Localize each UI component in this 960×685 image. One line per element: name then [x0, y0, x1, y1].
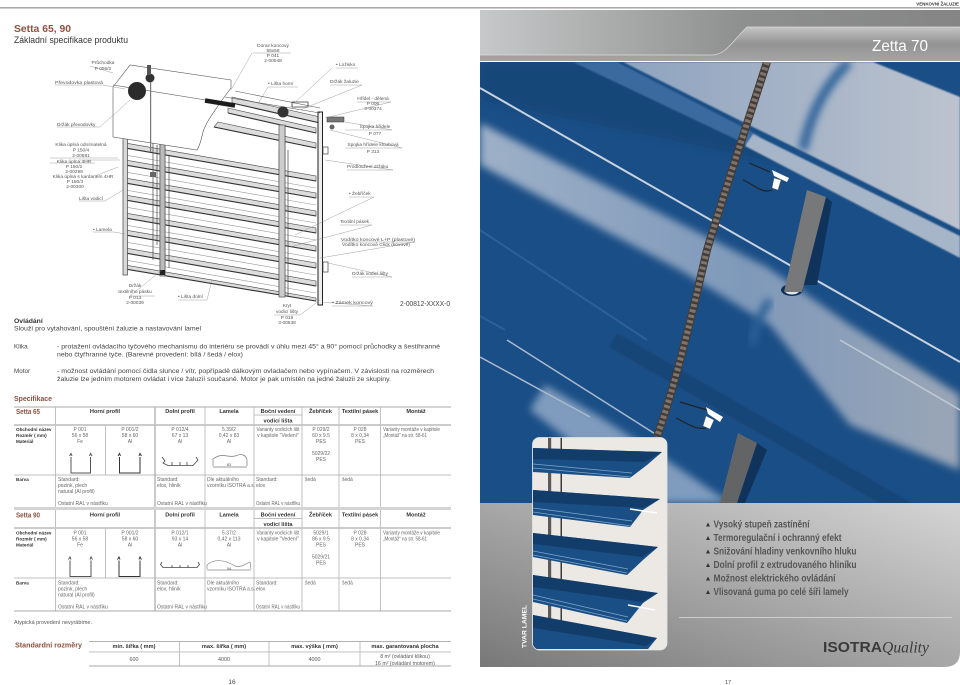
note: Atypická provedení nevyrábíme.	[14, 620, 92, 626]
strap shadow	[804, 197, 832, 285]
part labels: P 150/2	[66, 164, 83, 170]
spec table: Setta 90: Lamela	[219, 512, 240, 518]
part labels: 56x58	[266, 48, 280, 54]
spec table: Setta 90: Dle aktuálního	[207, 580, 239, 586]
lamellae	[125, 97, 320, 301]
spec table: Setta 65: Ostatní RAL v nástřiku	[157, 501, 207, 507]
spec table: Setta 90: Obchodní název	[16, 530, 52, 536]
part labels: P 313	[367, 149, 380, 155]
profile icon: lamella 5.39/2	[213, 455, 247, 467]
text block: Ovládání: Ovládání	[14, 318, 44, 325]
part labels: Držák žaluzie	[330, 79, 359, 85]
spec table: Setta 65: Dle aktuálního	[207, 477, 239, 483]
part labels: 2-00300	[66, 184, 84, 190]
part labels: Hřídel - dělená	[357, 96, 389, 102]
part labels: P 056/2	[95, 66, 112, 72]
part labels: 2-00039	[126, 300, 144, 306]
spec table: Setta 90: Barva	[16, 580, 29, 586]
spec table: Setta 90: 5029/21	[312, 554, 330, 560]
spec table: Setta 65: P 012/4	[171, 427, 189, 433]
profile icon: P 001	[68, 557, 92, 576]
spec table: Setta 90: Varianty vodicích lišt	[256, 530, 300, 536]
spec table: Setta 65: P 029/2	[312, 427, 330, 433]
drawing number: 2-00812-XXXX-0	[400, 301, 450, 308]
dimensions table: 4000	[218, 657, 230, 663]
spec table: Setta 65: Horní profil	[90, 409, 121, 415]
photo: blue lamellae close-up	[480, 62, 960, 540]
part labels: Klika úplná 4HR	[57, 159, 92, 165]
feature list: Možnost elektrického ovládání	[714, 574, 836, 584]
spec table: Setta 90: Fe	[77, 542, 83, 548]
part labels: 2-00048	[264, 58, 282, 64]
inset photo: lamella shape	[532, 437, 667, 650]
part labels: • Lišta dolní	[178, 294, 204, 300]
feature list: Snižování hladiny venkovního hluku	[714, 546, 856, 558]
right page header band	[480, 10, 960, 61]
feature list: Termoregulační i ochranný efekt	[714, 533, 842, 544]
spec table: Setta 90: Al	[128, 542, 132, 548]
spec table: Setta 90: šedá	[305, 580, 316, 586]
spec table: Setta 65: Al	[227, 439, 231, 445]
spec table: Setta 90	[14, 510, 451, 612]
spec table: Setta 65: Varianty vodicích lišt	[256, 427, 300, 433]
spec table: Setta 90: P 001	[74, 530, 87, 536]
feature list	[706, 520, 856, 598]
spec table: Setta 90: Standard:	[157, 580, 179, 586]
spec table: Setta 90: Žebříček	[309, 510, 333, 518]
upper light band	[623, 62, 960, 230]
spec table: Setta 65: Fe	[77, 439, 83, 445]
logo: Isotra Quality: ISOTRA	[823, 640, 883, 656]
spec table: Setta 65: Žebříček	[309, 407, 333, 415]
vertical label: Tvar lamel: TVAR LAMEL	[522, 605, 528, 648]
divider	[679, 616, 952, 619]
part labels: • Zámek koncový	[332, 300, 374, 306]
part labels: • Lišta horní	[268, 81, 294, 87]
spec table: Setta 90: Al	[178, 542, 182, 548]
spec table: Setta 65: šedá	[305, 477, 316, 483]
spec table: Setta 65: PES	[316, 439, 327, 445]
profile icon: P 012/1	[160, 562, 200, 568]
spec table: Setta 90: Montáž	[406, 512, 426, 518]
part labels: P 013	[129, 295, 142, 301]
spec table: Setta 65: Boční vedení	[261, 409, 296, 415]
part labels: Textilní pásek	[340, 219, 370, 225]
spec table: Setta 90: PES	[316, 542, 327, 548]
spec table: Setta 90: 86 x 9.5	[312, 536, 330, 542]
spec table: Setta 65: 56 x 58	[72, 433, 88, 439]
thin strip at top	[573, 62, 760, 146]
part labels: P 077	[369, 131, 382, 137]
part labels: 3-00538	[278, 320, 296, 326]
leader lines	[50, 53, 415, 315]
part labels: 2-00299	[65, 169, 83, 175]
vertical ladders	[153, 125, 288, 297]
profile icon: P 001/2	[118, 454, 142, 473]
profile icon: P 001/2	[118, 557, 142, 576]
dimensions table: max. šířka ( mm)	[202, 644, 246, 650]
text block: Ovládání: Slouží pro vytahování, spouštění žaluzie a nastavování lamel	[14, 326, 201, 332]
part labels: 2-00581	[72, 153, 90, 159]
profile icon: P 001	[70, 454, 92, 473]
feature list: Dolní profil z extrudovaného hliníku	[714, 560, 856, 571]
spec table: Setta 65: Obchodní název	[16, 427, 52, 432]
spec table: Setta 90: Standard:	[58, 580, 80, 586]
heading: Standardní rozměry: Standardní rozměry	[15, 640, 83, 650]
spec table: Setta 65: PES	[355, 439, 366, 445]
spec table: Setta 90: 58 x 60	[122, 536, 138, 542]
spec table: Setta 90: vodicí lišta	[264, 522, 293, 528]
lower textile strap	[737, 443, 767, 503]
part labels: Držák vodicí lišty	[352, 271, 389, 277]
logo: Isotra Quality: Quality	[882, 640, 930, 656]
dimensions table	[89, 641, 451, 667]
spec table: Setta 65: 58 x 60	[122, 433, 138, 439]
text block: Motor: Motor	[14, 368, 30, 375]
spec table: Setta 90: PES	[316, 560, 327, 566]
part labels: P 019	[281, 315, 294, 321]
spec table: Setta 90: Materiál	[16, 542, 33, 548]
spec table: Setta 65: 67 x 13	[172, 433, 188, 439]
dimensions table: 8 m² (ovládání klikou)	[380, 654, 430, 660]
text block: Motor: - možnost ovládání pomocí čidla slunce / vítr, popřípadě dálkovým ovladačem nebo vypínačem. V závislosti na rozměrech	[57, 368, 435, 375]
spec table: Setta 65: vzorníku ISOTRA a.s.	[207, 483, 255, 489]
part labels: 3-00374	[364, 106, 382, 112]
spec table: Setta 65: v kapitole "Vedení"	[257, 433, 299, 439]
ladder clip, lower	[676, 402, 723, 429]
spec table: Setta 90: 8 x 0,34	[351, 536, 369, 542]
part labels: Doraz koncový	[257, 43, 289, 49]
part labels: Držák	[129, 283, 142, 289]
spec table: Setta 90: Al	[227, 542, 231, 548]
spec table: Setta 65: 8 x 0,34	[351, 433, 369, 439]
spec table: Setta 90: P 001/2	[121, 530, 139, 536]
left page title: Základní specifikace produktu	[14, 35, 128, 45]
heading: Specifikace: Specifikace	[14, 394, 52, 403]
part labels: Spojka hřídele kloubová	[347, 142, 399, 148]
part labels: Klika úplná s kardanem 4HR	[53, 174, 114, 180]
spec table: Setta 90: 0,42 x 113	[218, 536, 241, 542]
spec table: Setta 90: šedá	[342, 580, 353, 586]
spec table: Setta 65: šedá	[342, 477, 353, 483]
spec table: Setta 90: Standard:	[256, 580, 278, 586]
part labels: Držák převodovky	[57, 122, 96, 128]
text block: Klika	[14, 342, 441, 358]
spec table: Setta 90: pozink, plech	[58, 586, 87, 592]
top rail	[225, 91, 320, 113]
spec table: Setta 65: elox, hliník	[157, 483, 181, 489]
spec table: Setta 90: Rozměr ( mm)	[16, 536, 47, 542]
left guide rail	[123, 137, 128, 275]
lower rib	[610, 334, 911, 503]
spec table: Setta 65: Standard:	[58, 477, 80, 483]
spec table: Setta 90: Varianty montáže v kapitole	[383, 530, 440, 536]
bottom gray panel	[480, 503, 960, 667]
text block: Motor: žaluzie lze jedním motorem ovládat i více žaluzií současně. Motor je pak umístěn na jedné žaluzii ze skupiny.	[57, 376, 391, 383]
spec table: Setta 65: Montáž	[406, 409, 426, 415]
spec table: Setta 65: Varianty montáže v kapitole	[383, 427, 440, 433]
part labels: Kryt	[283, 303, 292, 309]
part labels: vodicí lišty	[276, 309, 299, 315]
cut-away head box	[113, 65, 231, 150]
profile icon: P 012/4	[162, 457, 198, 466]
text block: Motor	[14, 368, 435, 383]
dark shading	[482, 64, 764, 158]
text block: Klika: nebo čtyřhranné tyče. (Barevné provedení: bílá / šedá / elox)	[57, 352, 243, 358]
spec table: Setta 65: P 028	[354, 427, 367, 433]
lower left light band	[530, 385, 730, 503]
part labels	[53, 43, 415, 326]
gearbox and shaft hardware	[128, 65, 344, 275]
part labels: Vodítko koncové Click (kovové)	[342, 242, 410, 248]
profile icon: lamella 5.37/2	[207, 561, 251, 570]
spec table: Setta 65: elox	[256, 483, 266, 489]
spec table: Setta 65: Standard:	[256, 477, 278, 483]
spec table: Setta 90: natural (Al profil)	[58, 592, 95, 598]
spec table: Setta 90: 5.37/2	[222, 530, 236, 536]
part labels: Lišta vodicí	[79, 196, 104, 202]
table divider band	[14, 507, 451, 510]
spec table: Setta 90: „Montáž“ na str. 58-61	[383, 536, 427, 542]
feature list: Vysoký stupeň zastínění	[714, 520, 810, 530]
part labels: • Lamela	[93, 227, 112, 233]
text block: Klika: - protažení ovládacího tyčového mechanismu do interiéru se provádí v úhlu mezi 45° a 90° pomocí průchodky a šestihranné	[57, 342, 441, 350]
spec table: Setta 90: Textilní pásek	[342, 512, 379, 518]
spec table: Setta 65: Textilní pásek	[342, 409, 379, 415]
spec table: Setta 90: Setta 90	[16, 512, 40, 520]
left page title	[14, 24, 128, 45]
spec table: Setta 90: Ostatní RAL v nástřiku	[256, 604, 300, 610]
right guide rail	[318, 112, 322, 305]
dimensions table: max. výška ( mm)	[291, 644, 338, 650]
part labels: Vodítko koncové L+P (plastové)	[341, 237, 415, 243]
spec table: Setta 65: Standard:	[157, 477, 179, 483]
dimensions table: 4000	[308, 657, 320, 663]
section label: Venkovní žaluzie: VENKOVNÍ ŽALUZIE	[916, 2, 959, 7]
spec table: Setta 90: P 012/1	[171, 530, 189, 536]
spec table: Setta 65: Ostatní RAL v nástřiku	[58, 501, 108, 507]
spec table: Setta 90: Ostatní RAL v nástřiku	[58, 604, 108, 610]
spec table: Setta 65: Al	[128, 439, 132, 445]
part labels: Převodovka plastová	[55, 80, 103, 86]
spec table: Setta 65: Rozměr ( mm)	[16, 433, 47, 438]
spec table: Setta 65: Al	[178, 439, 182, 445]
part labels: P 150/3	[67, 179, 84, 185]
ladder clip, upper	[743, 163, 789, 191]
logo: Isotra Quality	[823, 640, 930, 656]
spec table: Setta 90: elox	[256, 586, 266, 592]
spec table: Setta 90: Boční vedení	[261, 512, 296, 518]
spec table: Setta 65: natural (Al profil)	[58, 489, 95, 495]
spec table: Setta 90: 5029/1	[313, 530, 329, 536]
spec table: Setta 90: PES	[355, 542, 366, 548]
dimensions table: max. garantovaná plocha	[371, 644, 439, 650]
spec table: Setta 65: Barva	[16, 477, 29, 482]
spec table: Setta 90: vzorníku ISOTRA a.s.	[207, 586, 255, 592]
spec table: Setta 90: 56 x 58	[72, 536, 88, 542]
text block: Ovládání	[14, 318, 201, 332]
spec table: Setta 90: Ostatní RAL v nástřiku	[157, 604, 207, 610]
part labels: P 150/4	[73, 148, 90, 154]
spec table: Setta 65: Materiál	[16, 439, 33, 444]
spec table: Setta 90: 93 x 14	[172, 536, 188, 542]
spec table: Setta 65: 83	[227, 463, 231, 467]
feature list: Vlisovaná guma po celé šíři lamely	[714, 587, 849, 598]
spec table: Setta 65: Dolní profil	[165, 409, 195, 415]
spec table: Setta 65: 0,42 x 83	[219, 433, 240, 439]
spec table: Setta 65: 5.39/2	[222, 427, 236, 433]
spec table: Setta 65: P 001	[74, 427, 87, 433]
spec table: Setta 65: „Montáž“ na str. 58-61	[383, 433, 427, 439]
mid light band	[480, 123, 960, 470]
spec table: Setta 90: P 028	[354, 530, 367, 536]
spec table: Setta 65: 60 x 9.5	[312, 433, 330, 439]
part labels: P 041	[267, 53, 280, 59]
part labels: P 006	[367, 101, 380, 107]
spec table: Setta 90: Dolní profil	[165, 512, 195, 518]
part labels: • Ložisko	[336, 62, 356, 68]
part labels: Spojka hřídele	[360, 124, 391, 130]
technical drawing of the blind	[50, 43, 415, 326]
text block: Klika: Klika	[14, 344, 28, 350]
spec table: Setta 65: PES	[316, 457, 327, 463]
spec table: Setta 65: vodicí lišta	[264, 418, 293, 424]
left page title: Setta 65, 90	[14, 24, 71, 35]
header title: Zetta 70: Zetta 70	[872, 38, 928, 55]
spec table: Setta 90: v kapitole "Vedení"	[257, 536, 299, 542]
textile strap	[781, 190, 826, 296]
spec table: Setta 90: 94	[227, 567, 231, 571]
part labels: Průchodka	[92, 59, 115, 66]
dimensions table: min. šířka ( mm)	[113, 644, 156, 650]
dimensions table: 16 m² (ovládání motorem)	[375, 661, 435, 667]
top rule	[0, 7, 960, 9]
part labels: Prodloužení držáku	[347, 164, 389, 170]
lower strip	[745, 134, 960, 258]
spec table: Setta 90: elox, hliník	[157, 586, 181, 592]
dimensions table: 600	[130, 657, 138, 663]
spec table: Setta 65: Lamela	[219, 409, 240, 415]
rope	[657, 62, 767, 437]
spec table: Setta 65: 5029/22	[312, 451, 330, 457]
light rib lines	[480, 88, 960, 362]
spec table: Setta 65: Ostatní RAL v nástřiku	[256, 501, 300, 507]
blue shadow across band	[803, 62, 849, 150]
spec table: Setta 65: P 001/2	[121, 427, 139, 433]
spec table: Setta 65	[14, 406, 451, 507]
part labels: textilního pásku	[118, 289, 152, 295]
part labels: Klika úplná odnímatelná	[55, 142, 107, 148]
spec table: Setta 65: pozink, plech	[58, 483, 87, 489]
spec table: Setta 90: Horní profil	[90, 512, 121, 518]
part labels: • Žebříček	[349, 189, 371, 197]
spec table: Setta 65: Setta 65	[16, 409, 40, 416]
